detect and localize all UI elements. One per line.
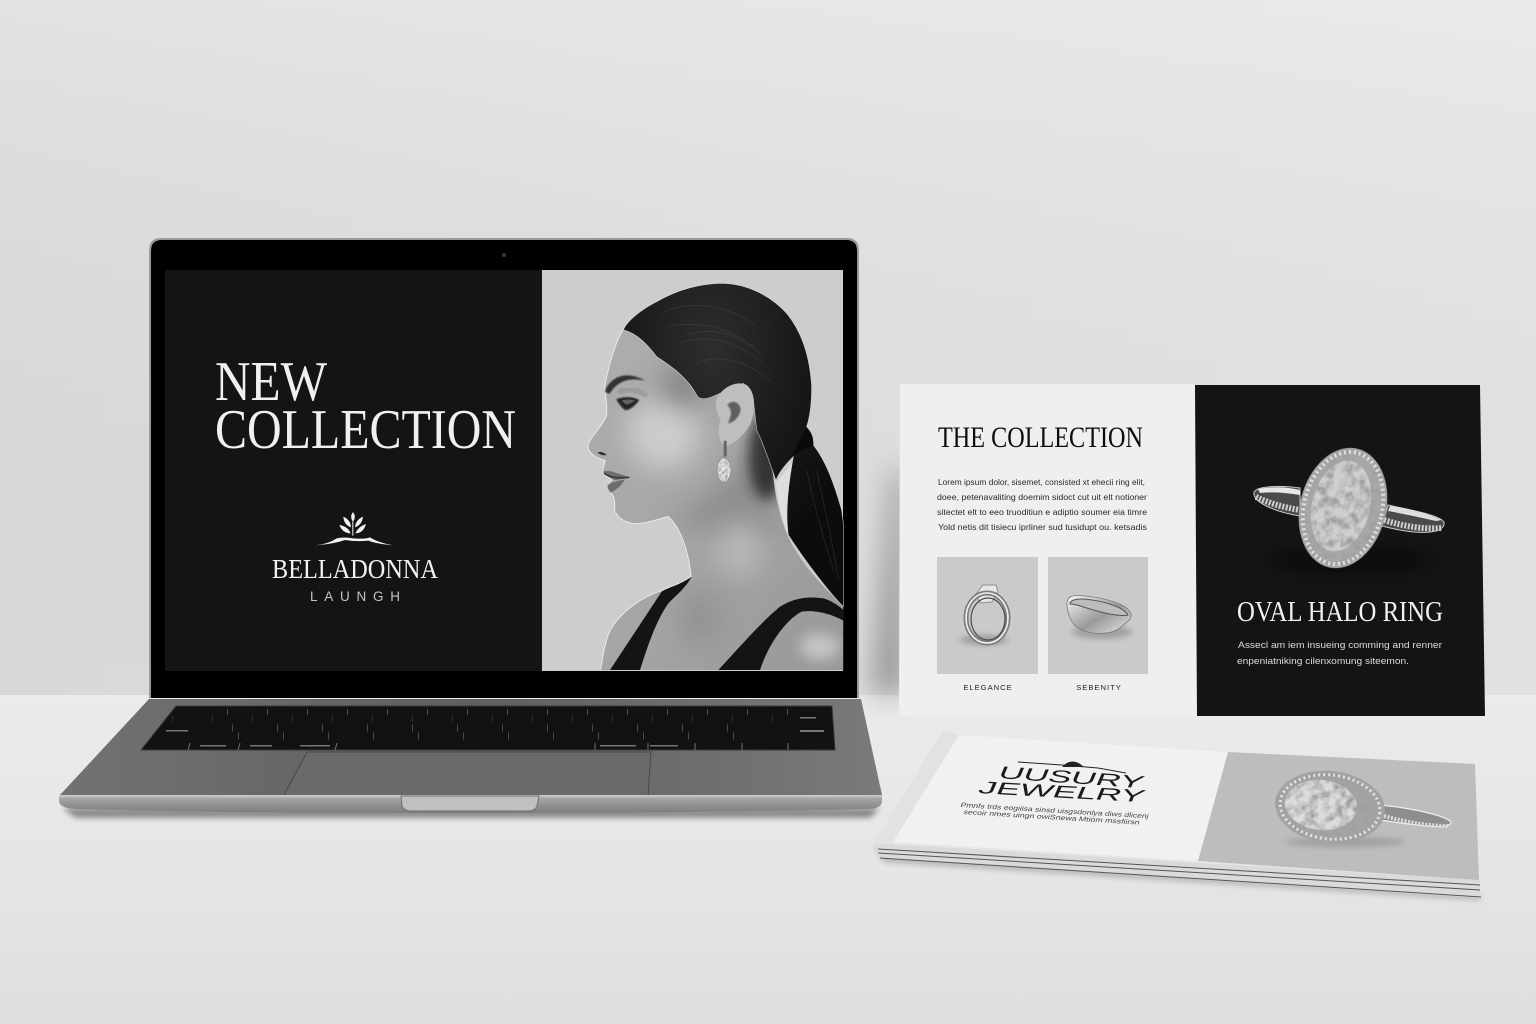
headline xyxy=(215,351,516,461)
desk surface xyxy=(0,695,1536,1024)
forehead and cheek highlight xyxy=(627,397,700,470)
lips xyxy=(603,471,630,493)
laptop desk shadow xyxy=(62,808,880,818)
brochure left page xyxy=(899,384,1197,716)
book spine cover xyxy=(873,730,959,845)
oval halo ring xyxy=(1254,438,1444,578)
headline: NEW xyxy=(215,351,327,413)
brochure right page xyxy=(1195,385,1485,716)
lookbook on desk xyxy=(873,730,1481,900)
eye xyxy=(616,397,639,410)
ring title: OVAL HALO RING xyxy=(1237,596,1443,628)
trackpad xyxy=(283,752,651,797)
tile captions: SEBENITY xyxy=(1076,683,1122,692)
collection heading: THE COLLECTION xyxy=(938,421,1143,454)
tile: elegance ring xyxy=(937,557,1038,674)
book logo mark xyxy=(1018,762,1126,773)
book body text xyxy=(959,802,1150,827)
screen left panel xyxy=(165,270,542,671)
neck light xyxy=(717,517,763,577)
ring halo xyxy=(1287,438,1399,578)
book title xyxy=(975,763,1149,806)
skin outline xyxy=(588,330,692,670)
book pages edge xyxy=(873,843,1481,898)
brand name: BELLADONNA xyxy=(272,553,438,584)
tile: serenity ring xyxy=(1048,557,1148,674)
laptop lid xyxy=(149,238,859,698)
sub brand: LAUNGH xyxy=(310,589,400,604)
headline: COLLECTION xyxy=(215,399,516,461)
behind-ear hair shadow xyxy=(748,413,785,500)
hair xyxy=(623,283,843,607)
body text: Lorem ipsum dolor, sisemet, consisted xt ehecii ring elit, xyxy=(938,477,1145,487)
keyboard xyxy=(141,706,835,750)
book ring xyxy=(1272,765,1451,849)
book title: JEWELRY xyxy=(975,778,1149,806)
book right page xyxy=(1198,752,1479,880)
brochure wall shadow xyxy=(872,470,905,694)
logo mark xyxy=(315,512,393,545)
tile captions xyxy=(963,683,1122,692)
screen xyxy=(165,270,847,673)
eye shadow xyxy=(618,390,647,396)
front lip xyxy=(59,795,882,813)
shoulder highlight xyxy=(800,633,840,660)
body text: doee, petenavaliting doemim sidoct cut uit elt notioner xyxy=(937,492,1147,502)
eyebrow xyxy=(605,375,645,394)
dress xyxy=(610,577,843,670)
ring description: Assecl am iem insueing comming and renner xyxy=(1238,639,1442,650)
temple shadow xyxy=(660,367,707,407)
chest shade xyxy=(680,592,718,638)
body text xyxy=(937,477,1147,532)
wall background xyxy=(0,0,1536,700)
portrait photo xyxy=(542,270,847,673)
skin xyxy=(587,327,847,673)
book body text: secoir nmes uingn owiSnewa Mtiom mssfiirsn xyxy=(962,809,1141,827)
nostril xyxy=(597,452,607,455)
lid notch xyxy=(401,796,539,811)
ring description: enpeniatniking cilenxomung siteemon. xyxy=(1237,655,1409,666)
ring band xyxy=(1254,486,1300,516)
book left page xyxy=(893,735,1228,861)
jaw shadow on neck xyxy=(680,462,775,538)
book title: UUSURY xyxy=(995,763,1148,792)
webcam xyxy=(502,253,506,257)
body text: sitectet elt to eeo truoditiun e adiptio soumer eia timre xyxy=(937,507,1147,517)
book shadow xyxy=(878,856,1480,900)
hair tie xyxy=(792,428,813,457)
book body text: Pmnfs trds eogiiisa sinsd uisgsdonlya diws dlicenj xyxy=(959,802,1150,820)
hair strands xyxy=(660,306,838,580)
laptop xyxy=(59,238,882,818)
brochure standing xyxy=(899,384,1485,716)
tile captions: ELEGANCE xyxy=(963,683,1013,692)
body text: Yold netis dit tisiecu iprliner sud tusidupt ou. ketsadis xyxy=(938,522,1147,532)
ear xyxy=(716,383,754,447)
earring xyxy=(717,441,731,482)
mockup scene xyxy=(0,191,1485,902)
laptop base xyxy=(60,699,882,795)
neck gap xyxy=(776,463,792,533)
ring description xyxy=(1237,639,1442,666)
ring stone xyxy=(1302,454,1380,558)
